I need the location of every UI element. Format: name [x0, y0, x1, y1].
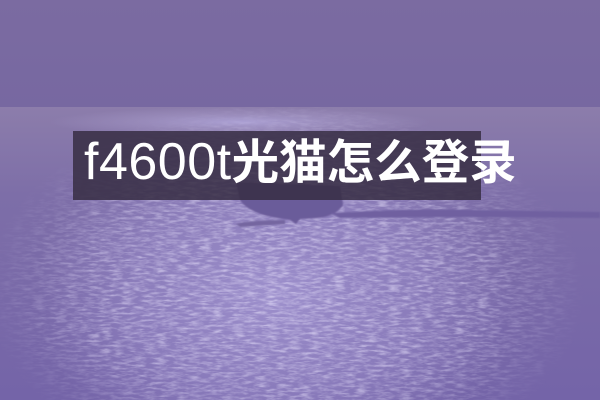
moonlight glow on the horizon: [50, 107, 430, 137]
sparkling water reflection: [0, 107, 600, 400]
title banner: [73, 131, 481, 200]
title: f4600t光猫怎么登录: [84, 124, 517, 193]
background: sea photograph with purple tint: [0, 107, 600, 400]
ripple texture: [0, 107, 600, 400]
boat silhouette: [236, 182, 600, 227]
sky: [0, 0, 600, 107]
sea: [0, 107, 600, 400]
